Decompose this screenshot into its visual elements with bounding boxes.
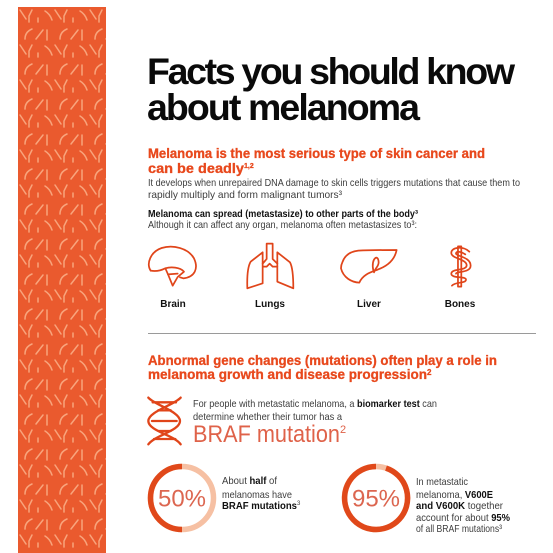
chart: 95 percent ring [344, 466, 408, 530]
label: lungs: Lungs [255, 299, 285, 310]
text block: metastasis: Melanoma can spread (metastasize) to other parts of the body³ [148, 208, 418, 220]
icon: lungs [247, 244, 293, 288]
heading: gene changes: Abnormal gene changes (mutations) often play a role in [148, 353, 497, 368]
icon: bones (staff with serpent) [451, 246, 471, 287]
heading: melanoma is serious: can be deadly [148, 161, 244, 176]
chart: 50 percent ring: 50% [158, 486, 206, 512]
text block: metastasis [148, 208, 418, 231]
heading: gene changes: melanoma growth and disease progression [148, 367, 427, 382]
divider [148, 332, 536, 334]
text block: half of melanomas [222, 475, 301, 512]
text block: half of melanomas: 3 [297, 501, 301, 507]
icon: brain [149, 247, 196, 286]
chart: 95 percent ring: 95% [352, 486, 400, 512]
text block: how melanoma develops: rapidly multiply and form malignant tumors³ [148, 189, 342, 201]
text block: biomarker test: determine whether their tumor has a [193, 411, 342, 423]
text block: V600E and V600K: and V600K together [416, 500, 503, 512]
text block: half of melanomas: melanomas have [222, 489, 292, 501]
icon: liver [341, 250, 397, 283]
label: brain: Brain [160, 299, 186, 310]
callout: BRAF mutation: BRAF mutation [193, 421, 340, 448]
text block: V600E and V600K: of all BRAF mutations³ [416, 523, 502, 535]
text block: V600E and V600K: In metastatic [416, 476, 468, 488]
title: about melanoma [147, 86, 421, 128]
label: bones: Bones [445, 299, 476, 310]
label: liver: Liver [357, 299, 381, 310]
chart: 50 percent ring [150, 466, 214, 530]
title: Facts you should know [147, 50, 516, 92]
icon: DNA helix [148, 398, 181, 444]
text block: how melanoma develops [148, 177, 520, 201]
text block: metastasis: Although it can affect any organ, melanoma often metastasizes to³: [148, 219, 417, 231]
text block: biomarker test [193, 398, 437, 423]
text block: V600E and V600K [416, 476, 511, 535]
text block: half of melanomas: About half of [222, 475, 277, 487]
text block: half of melanomas: BRAF mutations [222, 500, 297, 512]
text block: V600E and V600K: melanoma, V600E [416, 489, 493, 501]
heading: melanoma is serious: Melanoma is the most serious type of skin cancer and [148, 146, 485, 161]
callout: BRAF mutation: 2 [340, 424, 346, 436]
heading: gene changes: 2 [427, 368, 432, 377]
heading: gene changes [148, 353, 497, 382]
decorative orange side strip [18, 7, 106, 553]
title [147, 50, 516, 128]
heading: melanoma is serious [148, 146, 485, 176]
text block: V600E and V600K: account for about 95% [416, 512, 511, 524]
text block: biomarker test: For people with metastatic melanoma, a biomarker test can [193, 398, 437, 410]
heading: melanoma is serious: 1,2 [244, 163, 254, 170]
